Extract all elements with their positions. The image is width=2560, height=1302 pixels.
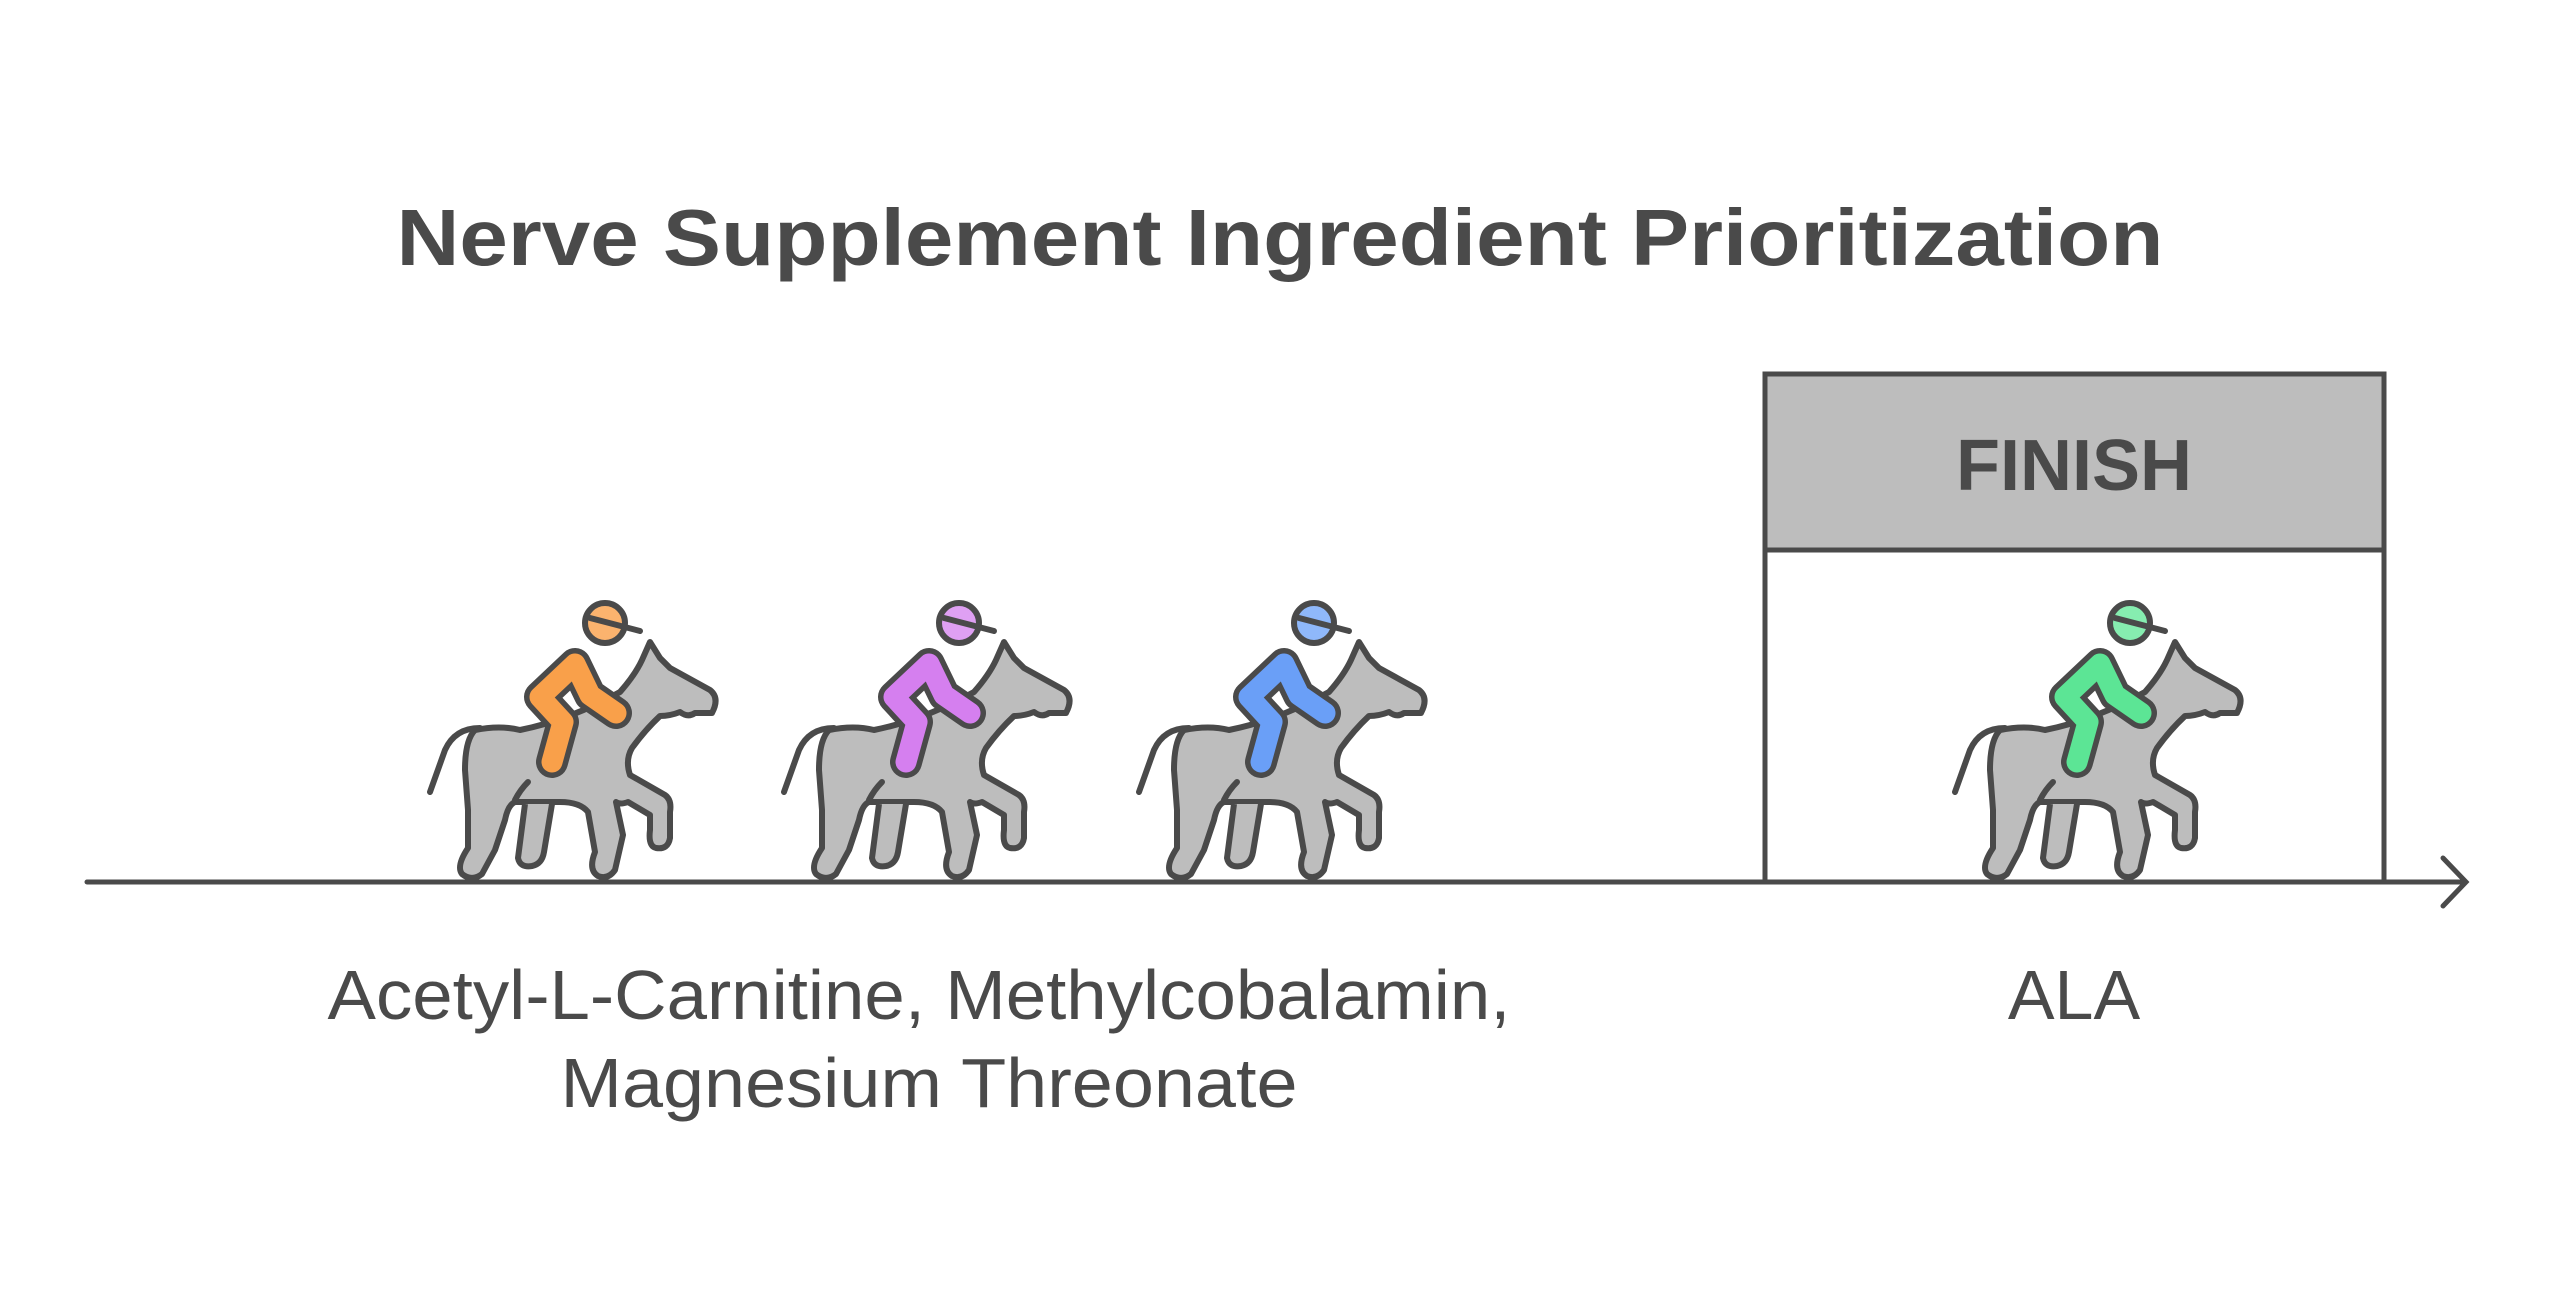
horse: purple xyxy=(784,603,1070,878)
label: ALA: ALA xyxy=(2008,956,2140,1034)
finish label: FINISH xyxy=(1956,426,2192,506)
label: trailing ingredients xyxy=(328,956,1510,1122)
horse: blue xyxy=(1139,603,1425,878)
timeline axis arrow xyxy=(87,858,2466,906)
horse: green (winner) xyxy=(1955,603,2241,878)
finish box xyxy=(1765,374,2384,882)
title: Nerve Supplement Ingredient Prioritization xyxy=(396,193,2164,282)
label: trailing ingredients: Magnesium Threonate xyxy=(560,1044,1298,1122)
label: trailing ingredients: Acetyl-L-Carnitine, Methylcobalamin, xyxy=(328,956,1510,1034)
horse: orange xyxy=(430,603,716,878)
